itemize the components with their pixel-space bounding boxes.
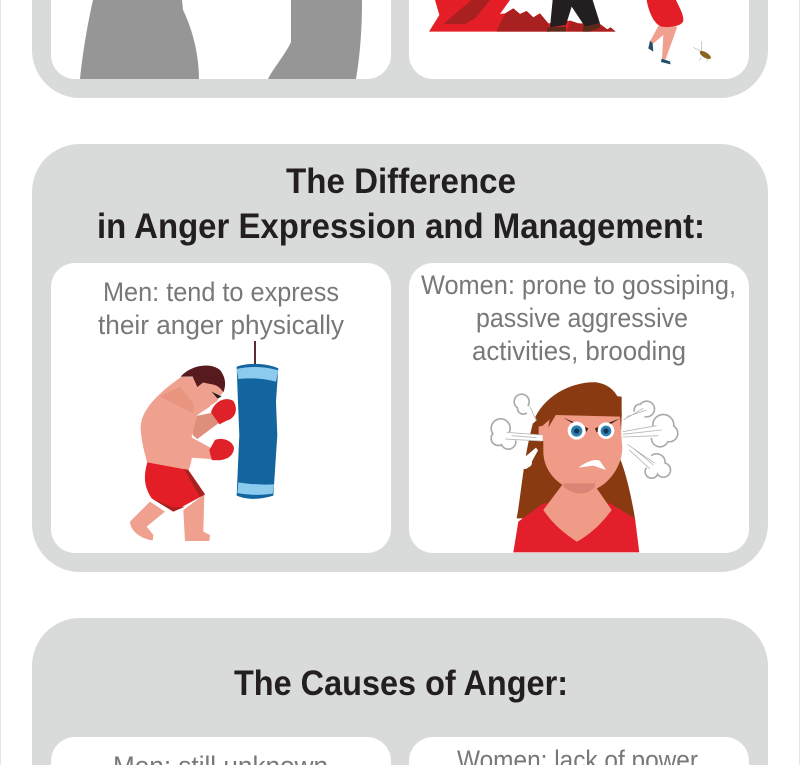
panel: anger expression and management bbox=[32, 144, 768, 572]
card: women express anger bbox=[409, 263, 749, 553]
text: women description: passive aggressive bbox=[476, 303, 688, 333]
text: men description: their anger physically bbox=[98, 310, 344, 340]
text: women description: activities, brooding bbox=[472, 336, 686, 366]
illustration: rubble and legs bbox=[429, 0, 616, 32]
steam puffs fill bbox=[492, 395, 677, 477]
illustration: grey silhouette bbox=[80, 0, 362, 79]
heading: difference in anger expression: in Anger Expression and Management: bbox=[97, 207, 705, 246]
panel: causes of anger bbox=[32, 618, 768, 765]
text: men description: Men: tend to express bbox=[103, 277, 339, 307]
card: men silhouette bbox=[51, 0, 391, 79]
text: women description bbox=[421, 270, 736, 366]
text: men description bbox=[98, 277, 344, 340]
steam puffs outline bbox=[490, 393, 679, 479]
illustration: angry woman with steam bbox=[490, 382, 679, 552]
card: men causes bbox=[51, 737, 391, 765]
card: women causes bbox=[409, 737, 749, 765]
panel: top section (cropped) bbox=[32, 0, 768, 98]
icon: cockroach bbox=[693, 41, 712, 62]
text: women description: Women: prone to gossiping, bbox=[421, 270, 736, 300]
card: men express anger bbox=[51, 263, 391, 553]
card: women illustration bbox=[409, 0, 749, 79]
illustration: woman in red dress bbox=[647, 0, 683, 64]
steam rays bbox=[505, 407, 662, 469]
heading: difference in anger expression bbox=[97, 162, 705, 246]
heading: difference in anger expression: The Difference bbox=[286, 162, 516, 201]
illustration: boxer and punching bag bbox=[130, 341, 278, 541]
heading: causes of anger: The Causes of Anger: bbox=[234, 664, 568, 703]
